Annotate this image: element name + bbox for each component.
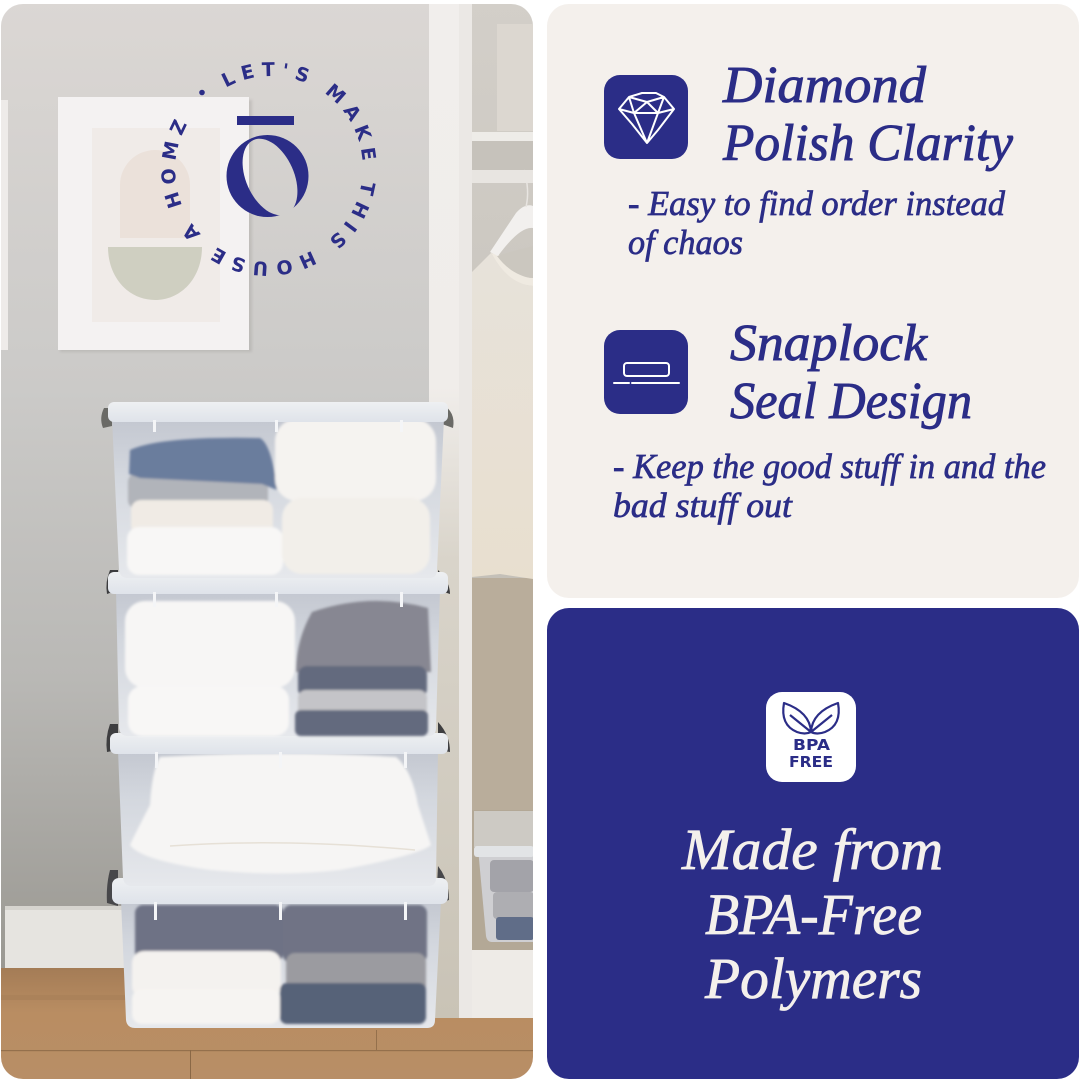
heading: made from bpa-free polymers: Made from <box>681 817 943 882</box>
wooden floor <box>0 968 533 1080</box>
stacked storage boxes <box>101 402 454 1028</box>
heading: snaplock seal design: Seal Design <box>730 373 972 430</box>
logo mark <box>226 116 308 217</box>
heading: diamond polish clarity: Polish Clarity <box>722 115 1014 172</box>
hanger and sweater <box>472 170 533 579</box>
text: snaplock benefit: bad stuff out <box>613 486 793 525</box>
circular slogan: LET'S MAKE THIS HOUSE A HOMZ <box>161 62 376 276</box>
panel: features <box>547 4 1079 598</box>
white closet column <box>429 0 472 1018</box>
heading: made from bpa-free polymers: Polymers <box>704 946 922 1011</box>
icon: bpa free leaves <box>766 692 856 782</box>
text: snaplock benefit: - Keep the good stuff in and the <box>613 447 1046 486</box>
text: snaplock benefit <box>613 447 1046 525</box>
baseboard <box>5 906 130 969</box>
small box on lower shelf <box>472 811 534 1018</box>
wall <box>0 0 432 970</box>
closet interior <box>472 0 537 952</box>
heading: made from bpa-free polymers <box>681 817 943 1011</box>
box 3 <box>106 722 450 886</box>
icon: diamond <box>604 75 688 159</box>
box 2 <box>106 570 450 736</box>
text: diamond benefit: of chaos <box>628 223 743 262</box>
box 4 <box>107 866 449 1028</box>
text: diamond benefit <box>628 184 1005 262</box>
logo badge <box>161 62 376 276</box>
icon: bpa free leaves: BPA <box>793 736 830 754</box>
icon: bpa free leaves: FREE <box>789 753 833 771</box>
icon: snaplock seal <box>604 330 688 414</box>
heading: snaplock seal design: Snaplock <box>730 315 928 372</box>
heading: made from bpa-free polymers: BPA-Free <box>705 882 922 947</box>
panel: bpa free <box>547 608 1079 1079</box>
heading: diamond polish clarity <box>722 57 1014 172</box>
framed wall art <box>0 97 252 352</box>
text: diamond benefit: - Easy to find order instead <box>628 184 1005 223</box>
heading: snaplock seal design <box>730 315 972 430</box>
heading: diamond polish clarity: Diamond <box>722 57 927 114</box>
panel: room photo <box>1 4 533 1079</box>
box 1 <box>101 402 454 578</box>
